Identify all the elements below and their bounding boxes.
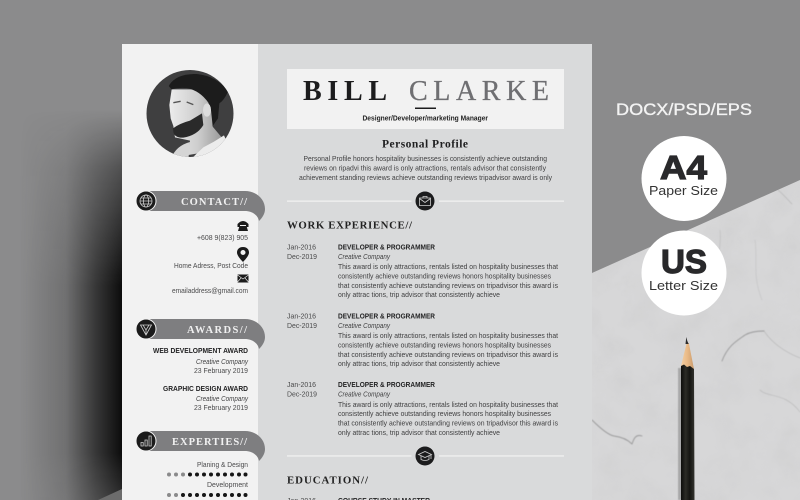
icon: globe — [136, 191, 156, 211]
job entry 3: Jan-2016 — [287, 380, 316, 389]
job entry 1: that consistently achieve outstanding reviews on tripadvisor this award is — [338, 281, 558, 290]
job entry 2: Jan-2016 — [287, 312, 316, 320]
job entry 2: consistently achieve outstanding reviews honors hospitality businesses — [338, 340, 551, 350]
job entry 2 — [287, 312, 559, 368]
job entry 3: This award is only attractions, rentals listed on hospitality businesses that — [338, 400, 559, 409]
ribbon: awards heading — [136, 319, 265, 349]
job entry 3: only attrac tions, trip advisor that consistently achieve — [338, 428, 500, 437]
badge: A4 paper size — [642, 136, 726, 221]
job entry 1: DEVELOPER & PROGRAMMER — [338, 242, 435, 252]
job title: Designer/Developer/marketing Manager — [362, 114, 488, 122]
profile text: achievement standing reviews achieve outstanding reviews tripadvisor award is only — [299, 173, 552, 182]
award two: 23 February 2019 — [194, 403, 248, 412]
job entry 3 — [287, 380, 559, 437]
profile text: reviews on ripadvi this award is only attractions, rentals advisor that consistently — [304, 164, 546, 172]
name: BILL — [303, 76, 387, 107]
badge: A4 paper size: Paper Size — [649, 184, 718, 198]
job entry 2: Dec-2019 — [287, 321, 317, 330]
background: grey desk — [34, 118, 122, 500]
job entry 3: Creative Company — [338, 390, 391, 398]
skill: planning and design: Planing & Design — [197, 460, 248, 469]
resume page — [258, 44, 592, 500]
icon: telephone — [238, 221, 248, 231]
pencil — [678, 337, 694, 500]
award two — [163, 384, 249, 412]
divider with graduation cap icon — [287, 446, 564, 466]
contact details — [172, 221, 249, 295]
job entry 3: Dec-2019 — [287, 390, 317, 398]
job entry 1: Dec-2019 — [287, 252, 317, 261]
badge: US letter size: US — [661, 243, 707, 280]
panel: main column — [258, 44, 592, 500]
award two: GRAPHIC DESIGN AWARD — [163, 384, 249, 393]
job entry 1: Creative Company — [338, 252, 391, 261]
profile text — [299, 154, 552, 182]
job entry 3: that consistently achieve outstanding reviews on tripadvisor this award is — [338, 418, 558, 428]
portrait photo — [146, 70, 235, 160]
badge: US letter size: Letter Size — [649, 279, 718, 293]
ribbon: expertise heading: EXPERTIES// — [172, 437, 248, 448]
divider with briefcase icon — [287, 192, 564, 210]
job entry 1: only attrac tions, trip advisor that consistently achieve — [338, 290, 500, 299]
icon: location pin — [237, 247, 249, 262]
job entry 1 — [287, 242, 559, 299]
job entry 2: This award is only attractions, rentals listed on hospitality businesses that — [338, 331, 559, 340]
job entry 2: that consistently achieve outstanding reviews on tripadvisor this award is — [338, 350, 558, 359]
award one — [153, 346, 249, 375]
format label: DOCX/PSD/EPS — [616, 100, 752, 119]
ribbon: expertise heading — [136, 431, 265, 461]
job entry 1: This award is only attractions, rentals listed on hospitality businesses that — [338, 262, 559, 271]
education entry cut off at page bottom — [287, 496, 431, 500]
job entry 2: only attrac tions, trip advisor that consistently achieve — [338, 359, 500, 368]
icon: bar chart — [136, 431, 156, 451]
background: marble surface — [592, 180, 800, 500]
skill: planning and design — [167, 460, 248, 476]
section heading: work experience: WORK EXPERIENCE// — [287, 220, 413, 232]
award one: Creative Company — [196, 357, 249, 366]
ribbon: awards heading: AWARDS// — [187, 325, 248, 336]
icon: award triangle — [136, 319, 156, 339]
email: emailaddress@gmail.com — [172, 286, 248, 295]
skill: development — [167, 480, 249, 497]
phone number: +608 9(823) 905 — [197, 233, 248, 242]
personal profile — [299, 138, 552, 182]
profile text: Personal Profile honors hospitality businesses is consistently achieve outstanding — [304, 154, 547, 163]
section heading: education: EDUCATION// — [287, 474, 369, 486]
award two: Creative Company — [196, 394, 249, 403]
panel: sidebar — [122, 44, 258, 500]
award one: 23 February 2019 — [194, 366, 248, 375]
job entry 1: Jan-2016 — [287, 242, 316, 252]
ribbon: contact heading — [136, 191, 265, 221]
award one: WEB DEVELOPMENT AWARD — [153, 346, 249, 355]
job entry 3: DEVELOPER & PROGRAMMER — [338, 380, 435, 389]
name banner — [287, 69, 564, 129]
badge: A4 paper size: A4 — [660, 149, 708, 186]
name — [303, 76, 549, 107]
ribbon: contact heading: CONTACT// — [181, 197, 248, 208]
job entry 2: Creative Company — [338, 321, 391, 330]
address: Home Adress, Post Code — [174, 261, 248, 270]
skill: development: Development — [207, 480, 249, 489]
job entry 2: DEVELOPER & PROGRAMMER — [338, 312, 435, 320]
badge: US letter size — [642, 230, 726, 316]
job entry 3: consistently achieve outstanding reviews honors hospitality businesses — [338, 409, 551, 418]
name: CLARKE — [409, 76, 549, 107]
icon: mail — [238, 274, 248, 282]
profile heading: Personal Profile — [382, 138, 468, 150]
job entry 1: consistently achieve outstanding reviews honors hospitality businesses — [338, 272, 551, 280]
awards list — [153, 346, 249, 412]
